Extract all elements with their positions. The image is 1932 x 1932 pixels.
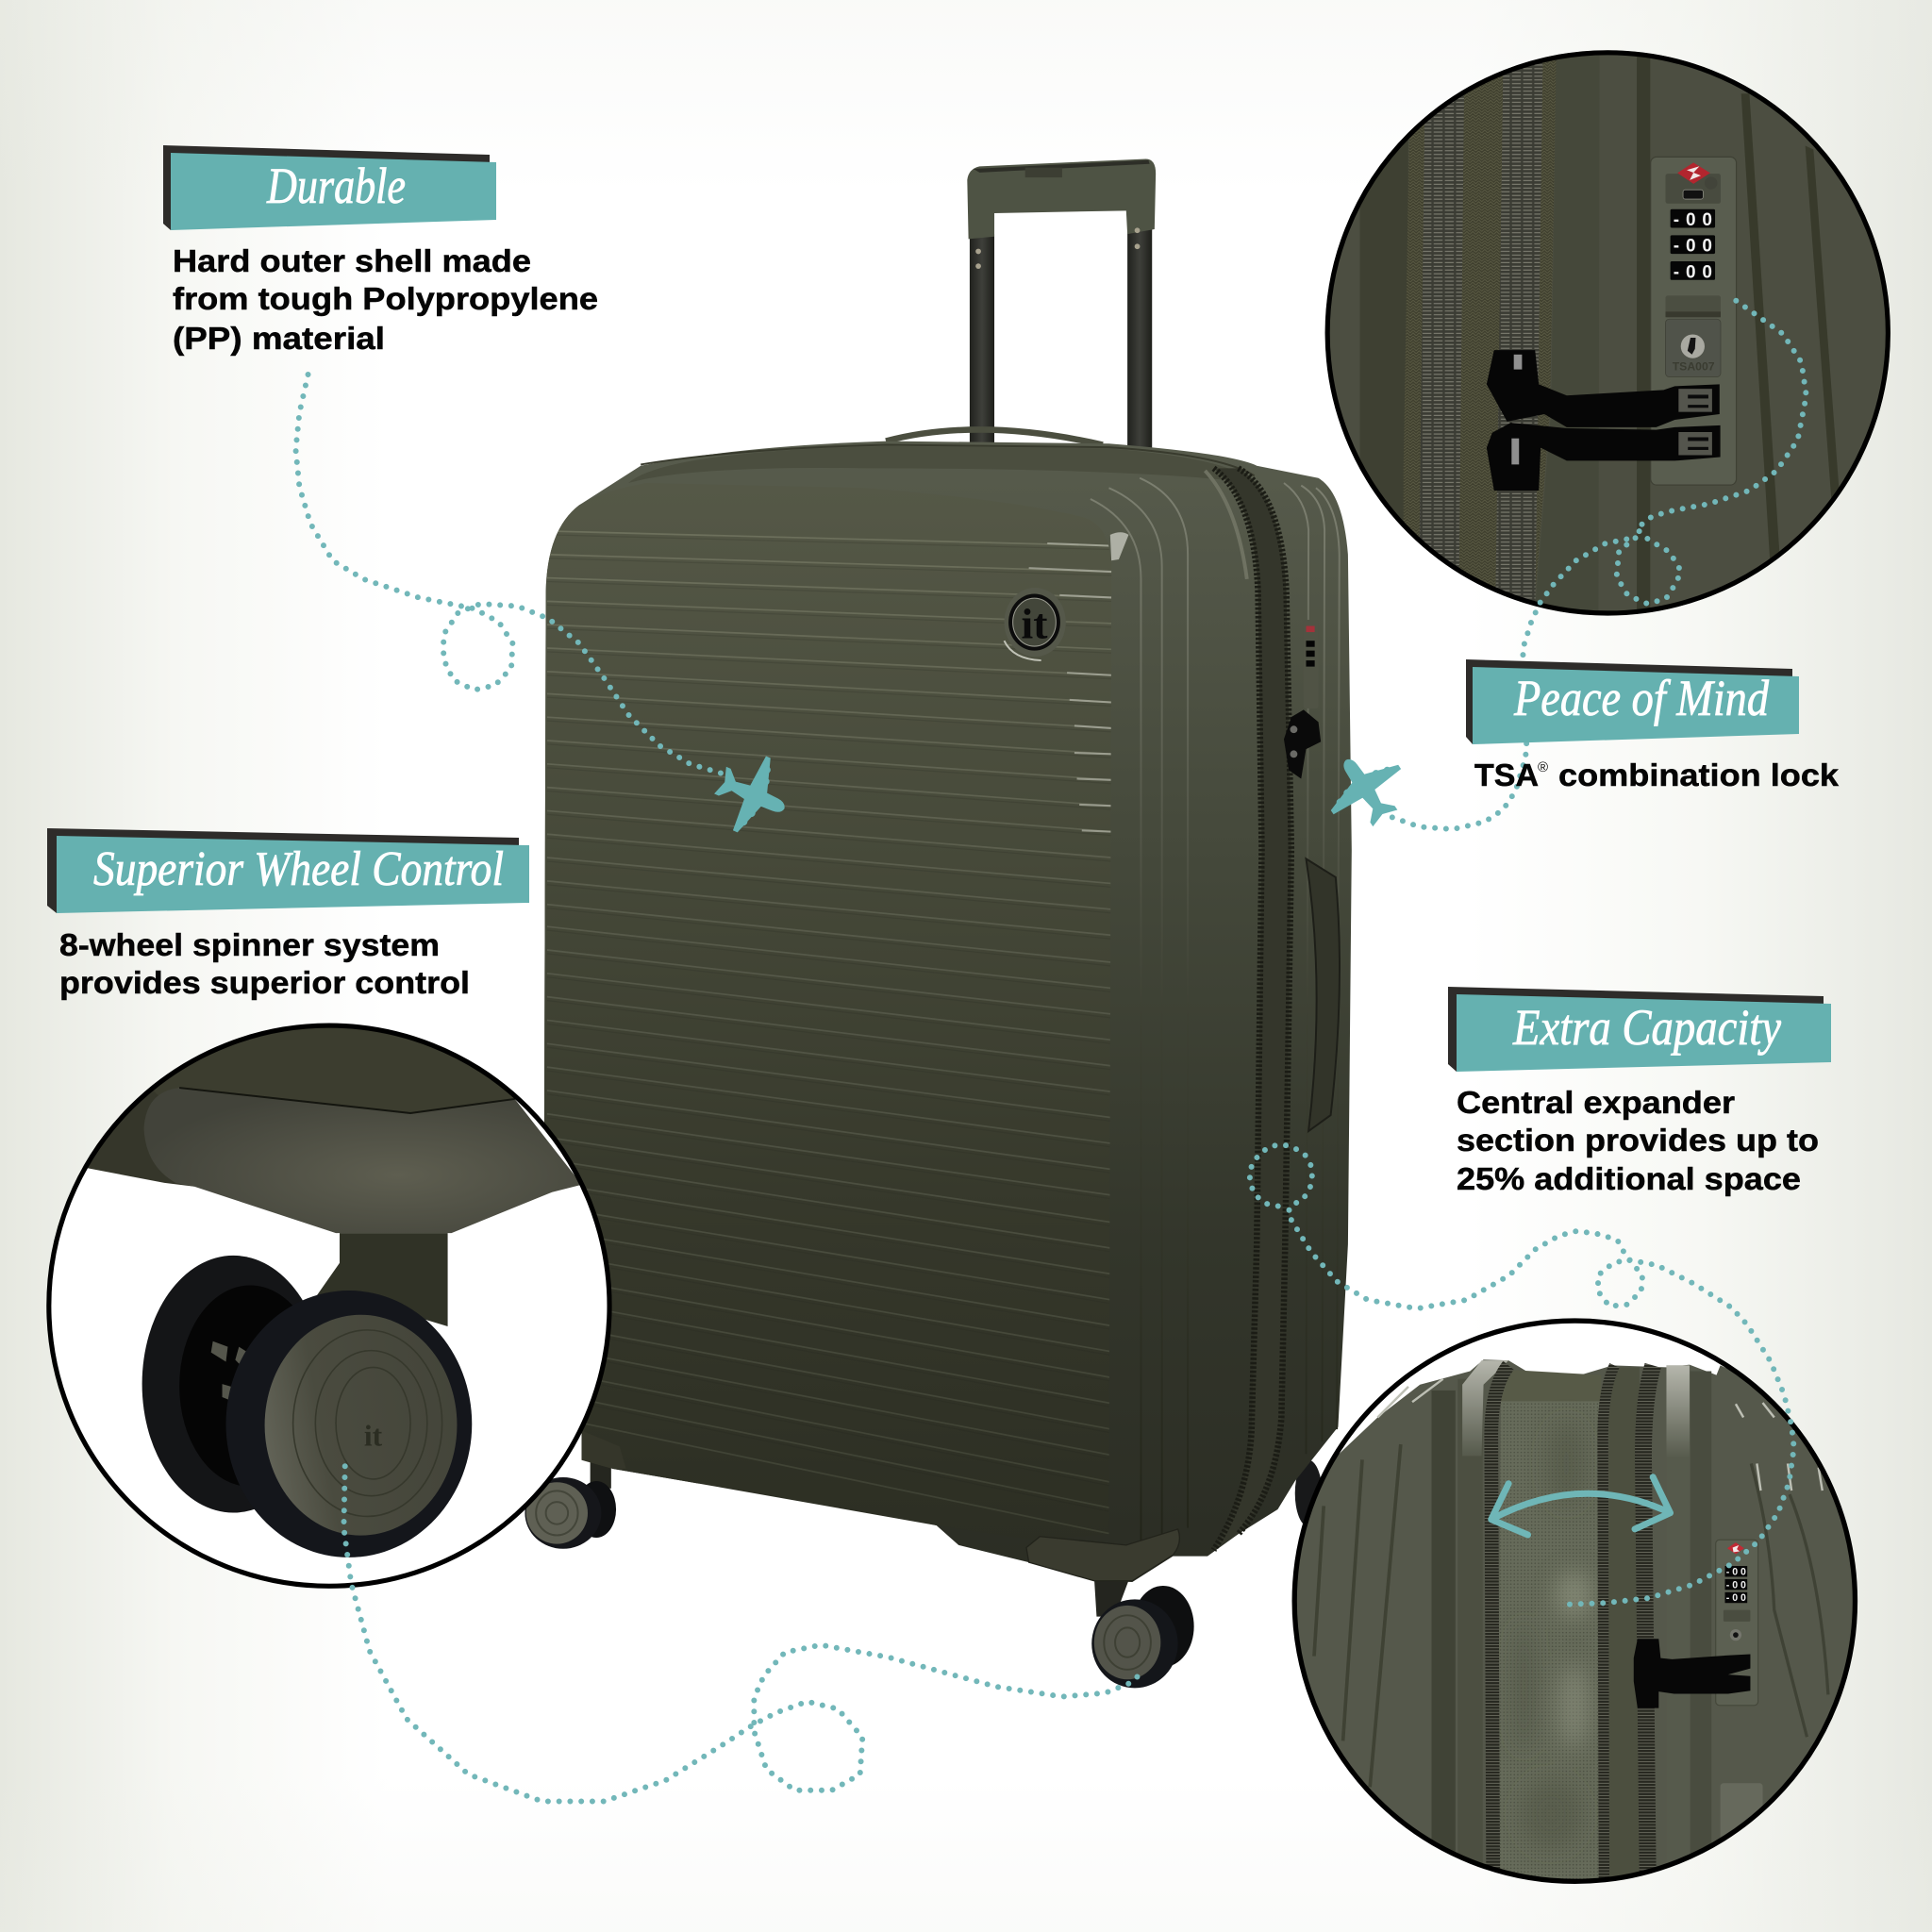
text: durable: (PP) material	[173, 321, 385, 356]
combination wheel 2: -00	[1674, 237, 1712, 257]
light top band left	[1462, 1360, 1508, 1456]
heading: wheel	[47, 828, 529, 913]
top carry handle	[886, 429, 1103, 445]
slanted groove two	[1806, 146, 1840, 500]
dotted route: durable	[295, 375, 727, 775]
zipper right	[1643, 1365, 1653, 1891]
wheel stem	[313, 1233, 448, 1326]
brand logo: it	[1022, 600, 1048, 648]
horizontal ribs	[547, 531, 1111, 1534]
far-left shell band	[1360, 140, 1408, 521]
TSA diamond	[1677, 162, 1710, 184]
text: durable	[173, 243, 598, 356]
zipper centre	[1603, 1365, 1614, 1891]
slanted groove one	[1741, 93, 1780, 559]
corner cap	[144, 1088, 582, 1233]
expansion double arrow	[1491, 1477, 1671, 1535]
bottom tile	[1721, 1783, 1763, 1849]
text: lock: combination lock	[1558, 758, 1840, 792]
suitcase body silhouette	[543, 441, 1352, 1582]
zipper left	[1491, 1365, 1508, 1891]
bottom corner cap front	[1026, 1529, 1179, 1581]
mesh soft highlight	[1512, 1422, 1593, 1849]
icon: plane on suitcase	[704, 743, 801, 846]
suitcase	[525, 158, 1352, 1688]
text: wheel	[59, 927, 470, 1000]
labels layer	[47, 145, 1840, 1196]
text: durable: from tough Polypropylene	[173, 281, 598, 316]
zipper pull top	[1487, 350, 1720, 427]
heading: capacity: Extra Capacity	[1512, 999, 1781, 1056]
callout: capacity	[1448, 987, 1831, 1196]
combination wheel 1: -00	[1674, 210, 1712, 230]
text: capacity: section provides up to	[1457, 1123, 1819, 1158]
rim line	[641, 445, 1255, 475]
corner glint	[1110, 532, 1128, 560]
text: durable: Hard outer shell made	[173, 243, 531, 278]
detail circle: wheel	[38, 1009, 622, 1588]
glints	[1377, 1379, 1823, 1491]
dark band	[1431, 1391, 1456, 1891]
corner back edge	[86, 1084, 194, 1187]
lock plate	[1651, 157, 1737, 485]
heading: durable: Durable	[266, 158, 406, 214]
front shell panel	[543, 483, 1111, 1541]
dotted route: lock	[1388, 301, 1807, 829]
small zipper pulls	[1634, 1639, 1750, 1708]
text: lock: TSA	[1474, 758, 1539, 792]
light band right	[1666, 1365, 1690, 1889]
heading: wheel: Superior Wheel Control	[93, 842, 504, 896]
telescopic handle	[967, 158, 1156, 508]
rib highlights	[1029, 543, 1111, 832]
heading: lock: Peace of Mind	[1513, 670, 1770, 726]
upper shell	[38, 1009, 622, 1168]
heading: lock	[1466, 659, 1799, 744]
combination wheel 3: -00	[1674, 262, 1712, 282]
lock plate: TSA007	[1673, 359, 1715, 373]
text: wheel: 8-wheel spinner system	[59, 927, 440, 962]
dotted route: wheel	[343, 1466, 1139, 1802]
text: capacity: Central expander	[1457, 1085, 1735, 1120]
zipper teeth column two	[1495, 53, 1543, 622]
bottom corner cap left	[581, 1430, 626, 1469]
brand logo	[1004, 588, 1066, 660]
icon: plane at lock route	[1312, 737, 1419, 841]
expander side stripes	[1091, 478, 1340, 1541]
front wheel tyre	[225, 1291, 472, 1557]
callout: durable	[163, 145, 598, 356]
small lock: -00	[1726, 1592, 1746, 1604]
side carry handle	[1306, 858, 1340, 1131]
top rim	[628, 446, 1255, 483]
dark groove	[1637, 38, 1650, 622]
small lock	[1716, 1540, 1758, 1706]
zipper teeth column one	[1419, 94, 1464, 568]
callout: wheel	[47, 828, 529, 1000]
side shoulder highlight	[1205, 471, 1247, 579]
wheel cap	[265, 1315, 457, 1536]
dark band right	[1690, 1372, 1711, 1891]
mesh expander panel	[1497, 1401, 1606, 1891]
heading: capacity	[1448, 987, 1831, 1072]
small lock: -00	[1726, 1579, 1746, 1591]
small lock: -00	[1726, 1566, 1746, 1577]
zipper pull bottom	[1487, 423, 1721, 491]
back wheel	[142, 1256, 325, 1512]
shell groove line	[179, 1088, 515, 1113]
text: capacity: 25% additional space	[1457, 1161, 1801, 1196]
left grooves	[1314, 1444, 1401, 1787]
mesh expander top	[1525, 1371, 1584, 1377]
zipper tape	[1404, 60, 1557, 622]
right grooves	[1751, 1463, 1828, 1737]
detail circle: combination lock	[1325, 38, 1890, 622]
text: wheel: provides superior control	[59, 965, 470, 1000]
callout: lock	[1466, 659, 1840, 792]
wheel cap: it	[364, 1419, 383, 1452]
side lock	[1284, 620, 1321, 778]
heading: durable	[163, 145, 496, 230]
text: lock: ®	[1538, 759, 1548, 775]
smooth shell band	[1556, 62, 1557, 95]
detail circle: expander	[1292, 1318, 1858, 1884]
wheel rear right	[1295, 1460, 1322, 1526]
text: capacity	[1457, 1085, 1819, 1196]
centre tape	[1608, 1367, 1640, 1891]
expander shell	[1296, 1359, 1853, 1872]
shell band left	[1457, 1379, 1483, 1891]
expander zipper band	[1214, 468, 1291, 1550]
zipper teeth right	[1239, 468, 1291, 1534]
wheel front right	[1091, 1577, 1194, 1688]
zipper teeth left	[1214, 468, 1261, 1550]
wheel rear left	[525, 1461, 616, 1549]
dotted route: capacity	[1249, 1144, 1794, 1605]
